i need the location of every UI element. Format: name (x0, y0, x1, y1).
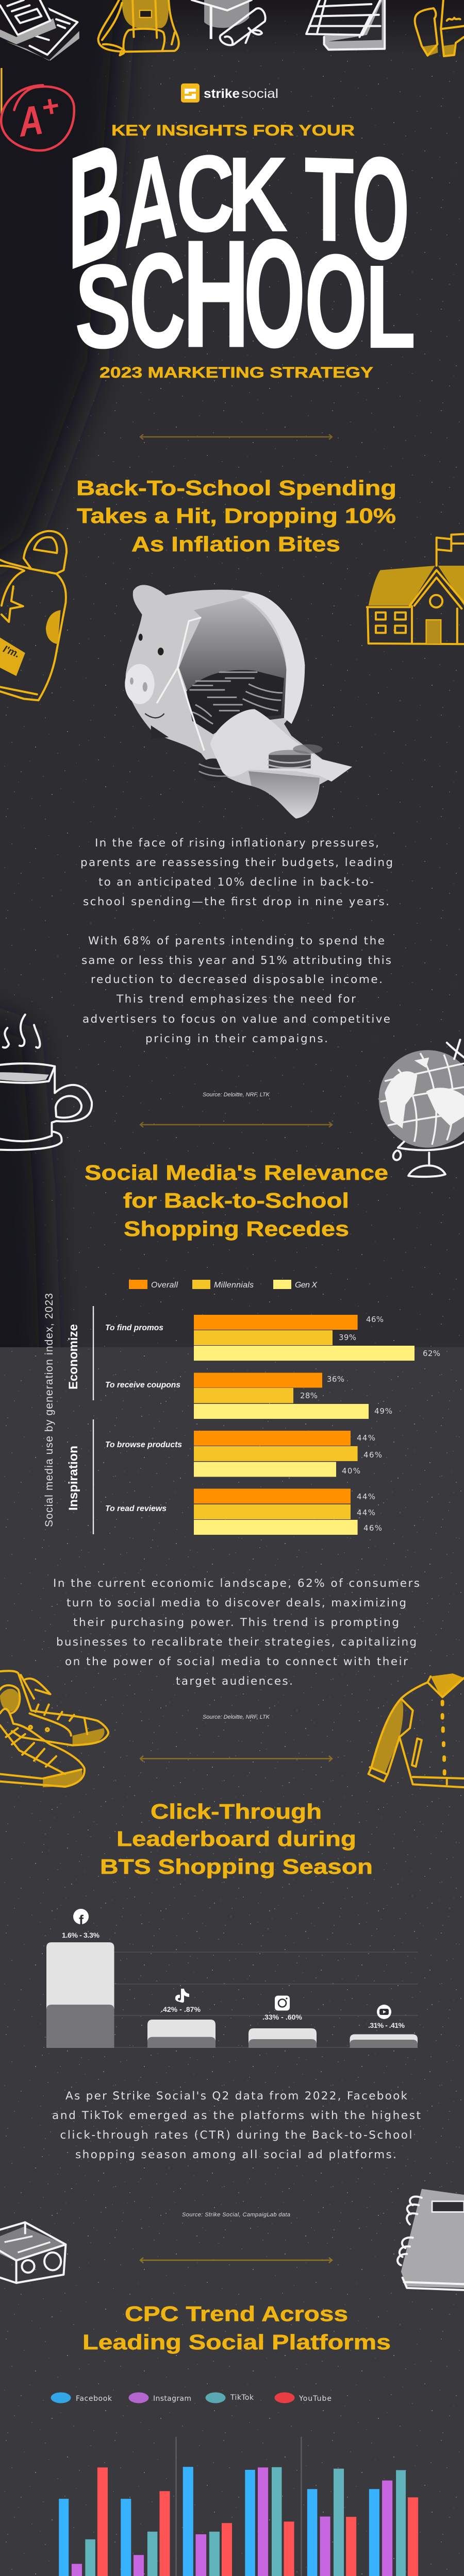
bar: tiktok: .42% - .87% (161, 2005, 201, 2013)
text: social media paragraph: on the power of social media to connect with their (65, 1655, 408, 1668)
heading: leaderboard: Click-Through (151, 1800, 322, 1823)
icon: coffee mug (0, 1014, 92, 1150)
legend: platforms (51, 2393, 332, 2403)
icon: notepad (306, 0, 385, 50)
title kicker: KEY INSIGHTS FOR YOUR (111, 122, 355, 139)
logo: strikesocial (181, 83, 278, 103)
icon: paint tubes (415, 0, 464, 56)
logo: strikesocial: strike (204, 87, 240, 101)
main title: BACK TO SCHOOL warped lettering: L (366, 241, 416, 372)
image: broken piggy bank with coins (125, 585, 352, 819)
axis title: Social media use by generation index, 2023 (43, 1293, 55, 1527)
text: spending paragraph one: In the face of rising inflationary pressures, (95, 837, 379, 850)
main title: BACK TO SCHOOL warped lettering: K (228, 135, 288, 253)
icon: globe (379, 1040, 464, 1177)
bar: facebook: 1.6% - 3.3% (62, 1931, 100, 1939)
icon: A+ grade: + (39, 89, 62, 124)
bars: to receive coupons: To receive coupons (105, 1381, 180, 1389)
heading: relevance (85, 1161, 388, 1241)
main title: BACK TO SCHOOL warped lettering: C (176, 132, 234, 256)
heading: spending: Takes a Hit, Dropping 10% (77, 504, 396, 528)
text: CTR paragraph: and TikTok emerged as the platforms with the highest (52, 2109, 421, 2122)
icon: graduation cap and diploma (192, 0, 266, 45)
legend: platforms: TikTok (230, 2394, 254, 2402)
source: deloitte: Source: Deloitte, NRF, LTK (203, 1714, 270, 1720)
icon: A+ grade: A (14, 97, 46, 146)
panel: click-through leaderboard (46, 1800, 421, 2218)
main title: BACK TO SCHOOL warped lettering: O (352, 126, 409, 291)
bars: to read reviews: To read reviews (105, 1504, 167, 1513)
icon: books (0, 0, 79, 61)
main title: BACK TO SCHOOL warped lettering: O (305, 228, 367, 376)
bar: tiktok (147, 1989, 216, 2048)
main title: BACK TO SCHOOL warped lettering: B (68, 105, 123, 303)
heading: leaderboard (100, 1800, 373, 1878)
text: CTR paragraph: As per Strike Social's Q2 data from 2022, Facebook (65, 2090, 408, 2103)
icon: schoolhouse (367, 534, 464, 644)
panel: social media relevance (43, 1161, 440, 1720)
legend: generations: Overall (151, 1281, 178, 1290)
icon: yellow backpack (98, 0, 179, 55)
panel: spending (0, 476, 464, 1098)
text: spending paragraph two: With 68% of parents intending to spend the (88, 935, 385, 947)
legend: generations: Gen X (295, 1281, 318, 1290)
icon: sneakers (0, 1671, 108, 1787)
main title: BACK TO SCHOOL warped lettering: T (305, 132, 354, 266)
bar: instagram (248, 1996, 317, 2048)
bars: to read reviews: 46% (363, 1523, 382, 1533)
text: social media paragraph: businesses to recalibrate their strategies, capitalizing (56, 1636, 417, 1649)
bars: to find promos: 62% (423, 1349, 440, 1358)
category: economize: Economize (67, 1324, 80, 1389)
heading: spending (76, 476, 396, 556)
legend: platforms: YouTube (299, 2395, 332, 2403)
text: spending paragraph one: to an anticipated 10% decline in back-to- (98, 876, 374, 889)
heading: relevance: for Back-to-School (123, 1189, 349, 1212)
text: spending paragraph one (80, 837, 393, 908)
text: CTR paragraph: click-through rates (CTR) during the Back-to-School (60, 2129, 412, 2142)
bars: to read reviews (105, 1489, 382, 1535)
legend: generations (129, 1280, 318, 1290)
category: inspiration: Inspiration (67, 1446, 80, 1511)
heading: spending: As Inflation Bites (131, 532, 340, 556)
icon: spiral notebook (397, 2189, 464, 2290)
title subline: 2023 MARKETING STRATEGY (100, 364, 373, 381)
main title: BACK TO SCHOOL warped lettering: O (244, 208, 305, 379)
heading: CPC trend: Leading Social Platforms (82, 2330, 391, 2354)
bars: to read reviews: 44% (357, 1508, 375, 1517)
arrow divider 3 (140, 1756, 332, 1761)
text: spending paragraph one: parents are reassessing their budgets, leading (80, 856, 393, 869)
text: social media paragraph: turn to social media to discover deals, maximizing (67, 1597, 406, 1609)
bars grouped by half month (59, 2437, 418, 2576)
bars: to find promos (105, 1315, 440, 1361)
text: spending paragraph two: This trend emphasizes the need for (116, 993, 356, 1006)
icon: varsity jacket (369, 1673, 464, 1787)
text: spending paragraph two: same or less this year and 51% attributing this (81, 954, 391, 967)
bar: instagram: .33% - .60% (262, 2013, 303, 2021)
bars: to browse products: 40% (342, 1466, 360, 1476)
main title: BACK TO SCHOOL warped lettering: S (75, 241, 131, 373)
arrow divider 1 (140, 434, 332, 439)
text: spending paragraph one: school spending—the first drop in nine years. (83, 895, 389, 908)
bars: to browse products (105, 1431, 382, 1477)
main title: BACK TO SCHOOL warped lettering: C (129, 225, 186, 377)
chart: CTR leaderboard (46, 1909, 418, 2048)
bars: to find promos: To find promos (105, 1324, 163, 1332)
source: strike social: Source: Strike Social, CampaigLab data (182, 2212, 290, 2218)
text: spending paragraph two: advertisers to focus on value and competitive (82, 1013, 390, 1026)
heading: relevance: Shopping Recedes (124, 1217, 349, 1241)
heading: leaderboard: BTS Shopping Season (100, 1855, 373, 1878)
bars: to browse products: 44% (357, 1433, 375, 1443)
text: social media paragraph: target audiences. (176, 1675, 293, 1688)
heading: spending: Back-To-School Spending (76, 476, 396, 500)
text: social media paragraph: their purchasing power. This trend is prompting (73, 1616, 399, 1629)
heading: leaderboard: Leaderboard during (117, 1827, 356, 1851)
bar: youtube (350, 2005, 418, 2048)
icons: top row of school doodles (0, 0, 464, 61)
legend: platforms: Facebook (76, 2395, 112, 2403)
bar: facebook (46, 1909, 114, 2048)
main title: BACK TO SCHOOL warped lettering: H (183, 209, 250, 379)
source: deloitte: Source: Deloitte, NRF, LTK (203, 1092, 270, 1098)
heading: CPC trend (82, 2302, 391, 2354)
bars: to find promos: 39% (339, 1333, 356, 1342)
icon: pencil sharpener (0, 2222, 65, 2283)
text: spending paragraph two: reduction to decreased disposable income. (91, 973, 383, 986)
arrow divider 2 (140, 1122, 332, 1127)
bars: to receive coupons: 36% (327, 1375, 344, 1384)
text: CTR paragraph: shopping season among all social ad platforms. (75, 2148, 396, 2161)
bar: facebook: f (79, 1912, 84, 1928)
text: spending paragraph two: pricing in their campaigns. (145, 1032, 328, 1045)
main title: BACK TO SCHOOL warped lettering (68, 105, 416, 379)
legend: platforms: Instagram (153, 2395, 191, 2403)
icon: water bottle (0, 531, 67, 700)
main title: BACK TO SCHOOL warped lettering: A (124, 125, 178, 274)
text: social media paragraph (53, 1577, 420, 1688)
bars: to browse products: 46% (363, 1450, 382, 1460)
chart: social media use bar chart (43, 1293, 440, 1535)
bars: to receive coupons (105, 1372, 392, 1419)
icon: A+ grade (1, 68, 74, 150)
legend: generations: Millennials (214, 1281, 254, 1290)
text: social media paragraph: In the current economic landscape, 62% of consumers (53, 1577, 420, 1590)
bars: to read reviews: 44% (357, 1492, 375, 1501)
bars: to receive coupons: 49% (374, 1406, 392, 1416)
bars: to browse products: To browse products (105, 1440, 182, 1449)
logo: strikesocial: social (241, 87, 278, 101)
icon: water bottle: I'm. (2, 643, 21, 660)
text: spending paragraph two (81, 935, 391, 1045)
heading: relevance: Social Media's Relevance (85, 1161, 388, 1184)
arrow divider 4 (140, 2258, 332, 2263)
bars: to receive coupons: 28% (300, 1391, 318, 1400)
heading: CPC trend: CPC Trend Across (125, 2302, 348, 2326)
chart: CPC bars (59, 2437, 418, 2576)
panel: CPC trend (51, 2302, 420, 2576)
bar: youtube: .31% - .41% (368, 2021, 405, 2029)
bars: to find promos: 46% (366, 1315, 384, 1324)
text: CTR paragraph (52, 2090, 421, 2161)
